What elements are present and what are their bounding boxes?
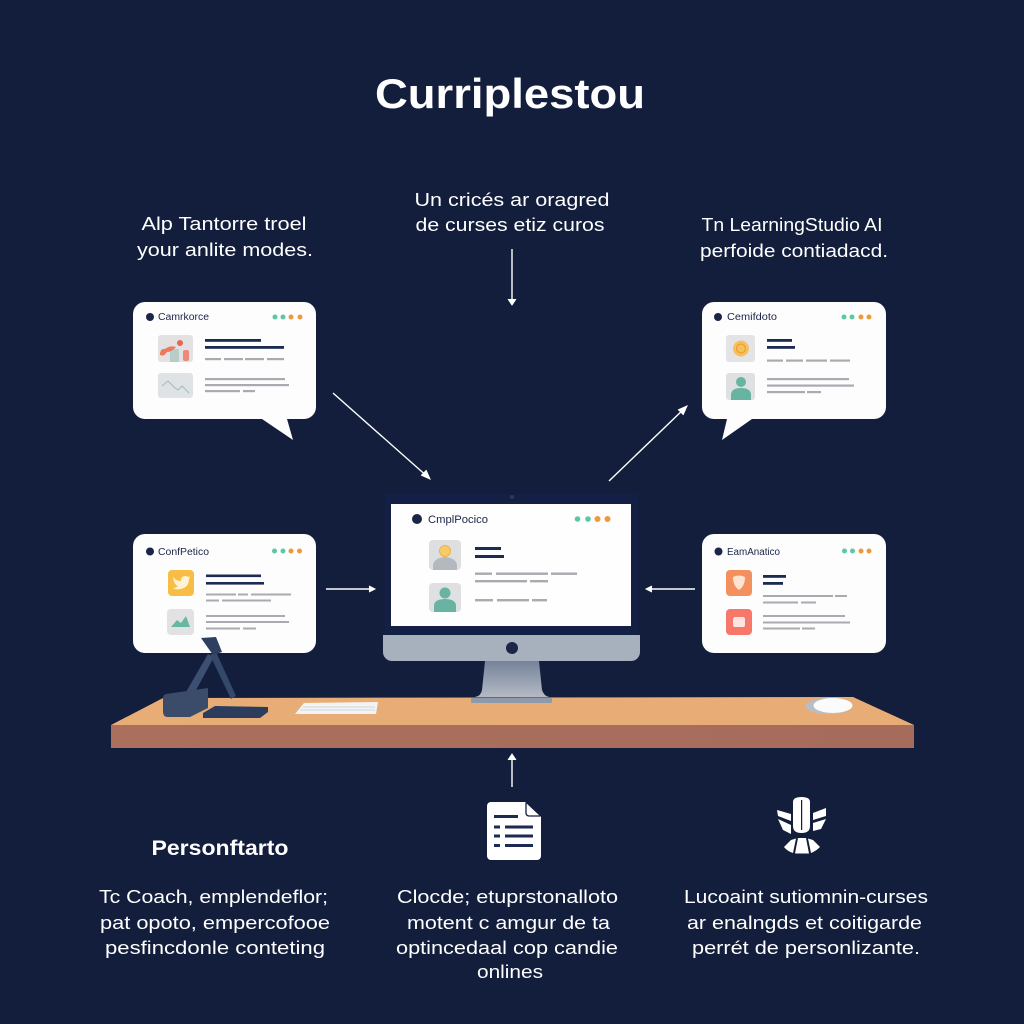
text block: bottom left: Tc Coach, emplendeflor;	[99, 887, 328, 907]
text block: top center	[414, 190, 610, 235]
panel: top left card	[133, 302, 316, 440]
text block: bottom right: perrét de personlizante.	[692, 938, 920, 958]
panel: top right card	[702, 302, 886, 440]
icon: yellow bird tile	[168, 570, 194, 596]
icon: document	[487, 802, 541, 860]
text block: bottom center: Clocde; etuprstonalloto	[397, 887, 618, 907]
text block: top left: Alp Tantorre troel	[142, 214, 306, 234]
arrow: bottom up to desk	[508, 754, 516, 787]
monitor	[383, 494, 640, 703]
icon: person thumbnail	[726, 373, 755, 400]
text block: bottom center	[396, 887, 618, 982]
text block: top left	[137, 214, 313, 260]
desk lamp	[163, 637, 236, 717]
text lines	[767, 339, 854, 393]
card header: Cemifdoto	[727, 312, 777, 323]
heading: personalization: Personftarto	[152, 837, 288, 860]
monitor chin	[383, 635, 640, 661]
text block: bottom center: optincedaal cop candie	[396, 938, 618, 958]
text block: bottom left: pat opoto, empercofooe	[100, 913, 330, 933]
icon: badge thumbnail	[726, 335, 755, 362]
text block: top right	[700, 215, 888, 261]
card header	[714, 312, 872, 323]
icon: mountain tile	[167, 609, 194, 635]
arrow: left card to monitor	[326, 586, 375, 592]
arrow: top left card to monitor	[333, 393, 430, 479]
card header	[146, 547, 302, 558]
screen header	[412, 514, 610, 526]
text block: bottom right	[684, 887, 928, 958]
icon: orange tile	[726, 570, 752, 596]
icon: emblem	[777, 797, 826, 854]
tablet	[203, 706, 268, 718]
arrow: monitor to top right card	[609, 406, 687, 481]
arrow: right card to monitor	[646, 586, 695, 592]
panel: middle left card	[133, 534, 316, 653]
text block: bottom right: Lucoaint sutiomnin-curses	[684, 887, 928, 907]
text lines	[206, 574, 291, 630]
icon: profile thumbnail one	[429, 540, 461, 570]
text block: top right: perfoide contiadacd.	[700, 241, 888, 261]
icon: bar chart thumbnail	[158, 335, 193, 362]
card header: ConfPetico	[158, 547, 209, 558]
icon: coral tile	[726, 609, 752, 635]
icon: line chart thumbnail	[158, 373, 193, 398]
text block: top right: Tn LearningStudio AI	[702, 215, 882, 235]
text block: bottom left: pesfincdonle conteting	[105, 938, 325, 958]
text block: bottom right: ar enalngds et coitigarde	[687, 913, 922, 933]
card header	[146, 312, 302, 323]
monitor screen	[391, 504, 631, 626]
card header: Camrkorce	[158, 312, 209, 323]
card header	[714, 547, 872, 558]
desk	[111, 697, 914, 748]
text block: bottom left	[99, 887, 330, 958]
text block: top left: your anlite modes.	[137, 240, 313, 260]
keyboard	[295, 702, 378, 714]
arrow: top center down	[508, 249, 516, 305]
mouse	[806, 698, 852, 714]
panel: middle right card	[702, 534, 886, 653]
title: Curriplestou	[375, 70, 645, 117]
card header: EamAnatico	[727, 547, 780, 558]
icon: profile thumbnail two	[429, 583, 461, 612]
text block: top center: Un cricés ar oragred	[414, 190, 610, 210]
text block: top center: de curses etiz curos	[416, 215, 604, 235]
text lines	[475, 547, 577, 601]
monitor stand	[471, 661, 552, 703]
screen header: CmplPocico	[428, 514, 488, 526]
text block: bottom center: onlines	[477, 962, 543, 982]
text block: bottom center: motent c amgur de ta	[407, 913, 611, 933]
text lines	[763, 575, 850, 630]
text lines	[205, 339, 289, 392]
